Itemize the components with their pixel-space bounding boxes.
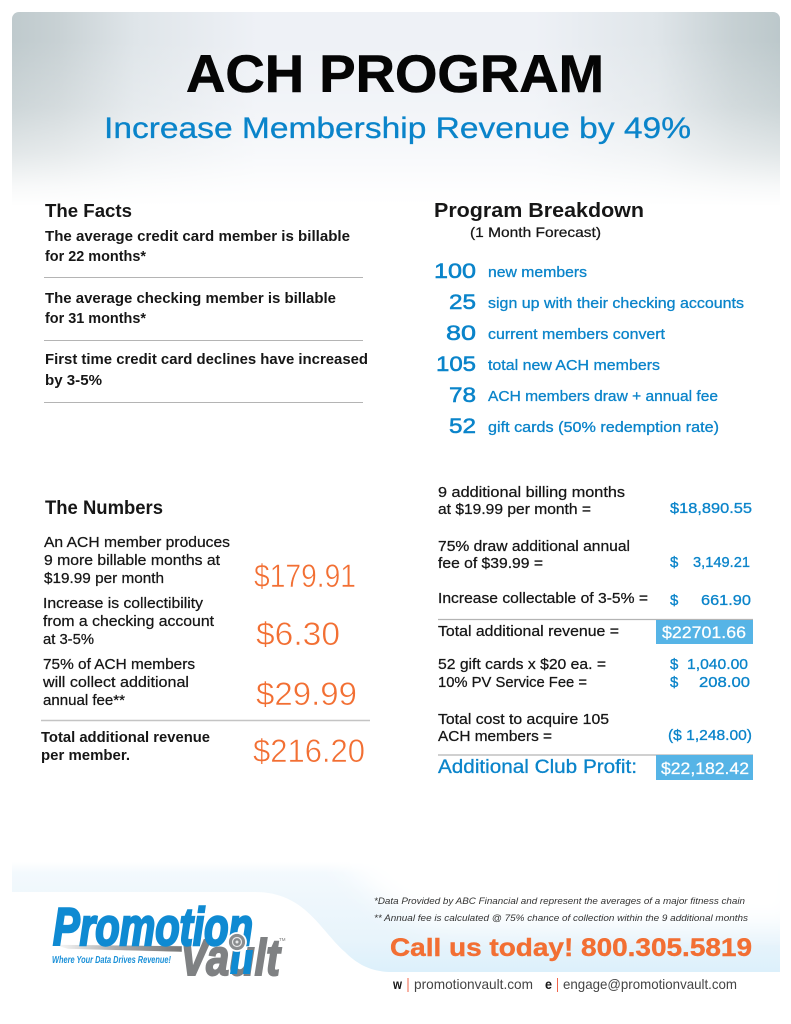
item: billable months: $19.99 per month — [44, 570, 164, 587]
row: total cost: ($ 1,248.00) — [668, 728, 752, 744]
contact line — [392, 976, 737, 992]
item: total per member — [41, 730, 365, 769]
fact: checking billable — [45, 291, 336, 327]
fact: credit card billable — [45, 229, 350, 265]
logo word: vault: Vault — [180, 928, 282, 986]
contact line: w — [392, 976, 402, 992]
footnotes: ** Annual fee is calculated @ 75% chance of collection within the 9 additional months — [374, 913, 748, 924]
row: gift cards: $ — [670, 656, 679, 673]
panel: program breakdown — [434, 200, 744, 438]
row: annual fee: 78 — [449, 383, 476, 407]
logo gray underline — [52, 944, 182, 952]
contact line: promotionvault.com — [414, 976, 533, 992]
logo blue stems — [230, 946, 253, 974]
item: annual fee: $29.99 — [256, 676, 357, 712]
row: gift cards — [438, 656, 748, 673]
row: billing months: $18,890.55 — [670, 500, 752, 517]
subtitle: Increase Membership Revenue by 49% — [104, 112, 691, 145]
header background — [12, 12, 780, 206]
item: collectibility: $6.30 — [256, 616, 340, 652]
row: converts: current members convert — [488, 326, 666, 343]
fact: declines: by 3-5% — [45, 373, 102, 389]
fact: checking billable: for 31 months* — [45, 311, 146, 327]
item: collectibility: Increase is collectibility — [43, 595, 204, 612]
row: checking sign ups — [449, 290, 744, 314]
footnotes — [374, 896, 748, 924]
item: billable months: An ACH member produces — [44, 534, 230, 551]
row: collectable — [438, 591, 751, 609]
row: new members: new members — [488, 264, 587, 281]
footnotes: *Data Provided by ABC Financial and represent the averages of a major fitness chain — [374, 896, 745, 907]
item: billable months: $179.91 — [254, 558, 356, 594]
row: total additional revenue — [438, 620, 753, 644]
item: billable months — [44, 534, 356, 594]
item: annual fee: 75% of ACH members — [43, 656, 195, 673]
row: gift cards: 52 — [449, 414, 476, 438]
row: annual fee: fee of $39.99 = — [438, 556, 543, 572]
row: total cost: Total cost to acquire 105 — [438, 712, 609, 728]
row: new members: 100 — [434, 259, 476, 283]
logo tagline: Where Your Data Drives Revenue! — [52, 955, 171, 966]
panel: the numbers — [41, 498, 370, 769]
item: collectibility — [43, 595, 340, 652]
row: gift cards: 52 gift cards x $20 ea. = — [438, 657, 606, 673]
row: billing months — [438, 485, 752, 518]
row: collectable: Increase collectable of 3-5% = — [438, 591, 648, 607]
row: service fee — [438, 674, 750, 691]
row: billing months: at $19.99 per month = — [438, 502, 591, 518]
row: additional club profit: $22,182.42 — [661, 759, 749, 778]
heading: program breakdown: Program Breakdown — [434, 200, 644, 222]
row: converts — [446, 321, 666, 345]
contact line: e — [545, 976, 552, 992]
row: annual fee — [449, 383, 718, 407]
row: total ach: 105 — [436, 352, 476, 376]
row: service fee: 10% PV Service Fee = — [438, 675, 587, 691]
row: service fee: 208.00 — [699, 674, 750, 691]
row: total additional revenue: $22701.66 — [662, 623, 746, 642]
row: annual fee — [438, 539, 750, 572]
row: collectable: 661.90 — [701, 592, 751, 609]
item: total per member: $216.20 — [253, 733, 365, 769]
item: collectibility: from a checking account — [43, 613, 215, 630]
logo word: promotion: Promotion — [53, 898, 253, 957]
panel: revenue table — [438, 485, 753, 780]
heading: the facts: The Facts — [45, 201, 132, 221]
footer swoosh — [12, 870, 780, 972]
contact line: engage@promotionvault.com — [563, 976, 737, 992]
row: billing months: 9 additional billing months — [438, 485, 625, 501]
row: total cost: ACH members = — [438, 729, 552, 745]
logo target icon — [228, 933, 246, 951]
row: additional club profit — [438, 755, 753, 780]
item: collectibility: at 3-5% — [43, 631, 94, 648]
item: annual fee: will collect additional — [42, 674, 189, 691]
item: billable months: 9 more billable months at — [44, 552, 221, 569]
item: annual fee — [42, 656, 357, 712]
fact: checking billable: The average checking member is billable — [45, 291, 336, 307]
row: annual fee: 75% draw additional annual — [438, 539, 630, 555]
row: total additional revenue: Total additional revenue = — [438, 624, 619, 640]
item: annual fee: annual fee** — [43, 692, 125, 709]
fact: credit card billable: for 22 months* — [45, 249, 146, 265]
row: annual fee: $ — [670, 554, 679, 571]
item: total per member: per member. — [41, 748, 130, 764]
item: total per member: Total additional revenue — [41, 730, 210, 746]
row: annual fee: 3,149.21 — [693, 554, 750, 571]
title: ACH PROGRAM — [186, 45, 604, 104]
row: checking sign ups: sign up with their checking accounts — [488, 295, 744, 312]
row: checking sign ups: 25 — [449, 290, 476, 314]
logo trademark: TM — [279, 937, 286, 942]
heading: the numbers: The Numbers — [45, 498, 163, 519]
call to action: Call us today! 800.305.5819 — [390, 934, 752, 962]
row: total cost — [438, 712, 752, 745]
fact: declines: First time credit card declines have increased — [45, 352, 368, 368]
subheading: forecast: (1 Month Forecast) — [470, 224, 601, 240]
row: gift cards — [449, 414, 719, 438]
row: gift cards: gift cards (50% redemption rate) — [488, 419, 719, 436]
fact: credit card billable: The average credit card member is billable — [45, 229, 350, 245]
row: total ach: total new ACH members — [488, 357, 660, 374]
row: annual fee: ACH members draw + annual fee — [488, 388, 718, 405]
row: total ach — [436, 352, 660, 376]
row: converts: 80 — [446, 321, 476, 345]
row: new members — [434, 259, 587, 283]
row: service fee: $ — [670, 674, 679, 691]
logo: promotion vault — [52, 898, 286, 986]
panel: the facts — [44, 201, 368, 402]
row: gift cards: 1,040.00 — [687, 656, 748, 673]
row: collectable: $ — [670, 592, 679, 609]
row: additional club profit: Additional Club Profit: — [438, 757, 637, 778]
fact: declines — [45, 352, 368, 389]
